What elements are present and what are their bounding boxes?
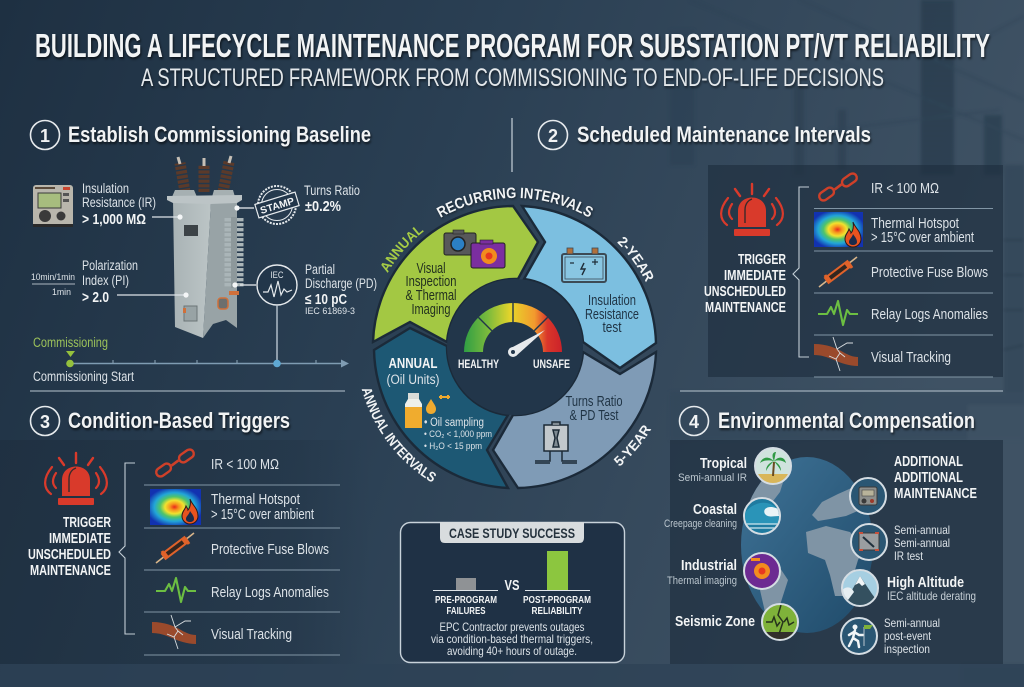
- text: tropical: Tropical: [700, 456, 747, 472]
- text: case study description: EPC Contractor prevents outages: [440, 620, 584, 634]
- heading: section 4: [680, 406, 975, 436]
- text: insulation resistance test: Insulation: [588, 292, 636, 309]
- text: visual inspection: Visual: [416, 260, 446, 277]
- icon: red siren: [45, 453, 107, 505]
- icon: protective fuse: [819, 257, 857, 287]
- text: trigger immediate unscheduled maintenance: UNSCHEDULED: [28, 547, 111, 563]
- text: trigger immediate unscheduled maintenance: MAINTENANCE: [30, 563, 111, 579]
- segment: 2-year insulation resistance: [522, 206, 656, 368]
- heading: section 4: Environmental Compensation: [718, 408, 975, 433]
- text: trigger immediate unscheduled maintenance: IMMEDIATE: [49, 531, 111, 547]
- panel: 3 condition-based triggers: Visual Tracking: [211, 627, 292, 643]
- heading: section 4: 4: [689, 412, 699, 432]
- tab: case study heading: [440, 522, 584, 543]
- callout: turns ratio: [304, 183, 360, 215]
- callout: partial discharge: ≤ 10 pC: [305, 292, 347, 308]
- icon: stamp test: [851, 524, 887, 560]
- callout: partial discharge: IEC 61869-3: [305, 306, 355, 317]
- heading: section 1: [30, 120, 371, 150]
- text: semi-annual IR test: Semi-annual: [894, 523, 950, 537]
- text: thermal hotspot: [211, 492, 314, 523]
- icon: broken chain: [818, 172, 858, 202]
- heading: section 3: [30, 406, 290, 436]
- icon: post-event hiker: [841, 618, 877, 654]
- callout: polarization index: Polarization: [82, 258, 138, 273]
- text: trigger immediate unscheduled maintenance: [704, 252, 786, 316]
- text: tropical: Semi-annual IR: [678, 472, 747, 484]
- text: industrial: Industrial: [681, 558, 737, 574]
- callout: polarization index: Index (PI): [82, 273, 129, 288]
- text: insulation resistance test: test: [602, 319, 622, 336]
- icon: insulation tracking crack: [814, 337, 858, 371]
- text: high altitude: IEC altitude derating: [887, 589, 976, 603]
- text: thermal hotspot: Thermal Hotspot: [211, 492, 300, 508]
- text: thermal hotspot: > 15°C over ambient: [871, 230, 974, 246]
- icon: protective fuse: [156, 533, 194, 563]
- panel: 4 environmental compensation: [664, 406, 1003, 664]
- icon: insulation resistance meter: [33, 185, 73, 227]
- bar chart: pre vs post program: FAILURES: [446, 606, 486, 617]
- text: case study description: avoiding 40+ hours of outage.: [447, 644, 577, 658]
- text: thermal hotspot: [871, 216, 974, 246]
- text: turns ratio and PD test: & PD Test: [570, 407, 619, 424]
- icon: high altitude: [842, 570, 878, 606]
- icon: industrial: [744, 553, 780, 589]
- text: insulation resistance test: [585, 292, 639, 336]
- tab: case study heading: CASE STUDY SUCCESS: [449, 525, 575, 541]
- text: trigger immediate unscheduled maintenance: TRIGGER: [738, 252, 786, 268]
- text: seismic zone: Seismic Zone: [675, 614, 755, 630]
- gauge: healthy to unsafe: [458, 303, 570, 371]
- segment: 5-year turns ratio: [493, 352, 656, 488]
- callout: polarization index: > 2.0: [82, 290, 109, 306]
- callout: turns ratio: ±0.2%: [305, 199, 341, 215]
- callout: insulation resistance: Insulation: [82, 181, 129, 196]
- panel: 2 scheduled maintenance intervals: Protective Fuse Blows: [871, 265, 988, 281]
- text: oil sampling limits: • Oil sampling: [424, 417, 484, 429]
- icon: stamp: STAMP: [259, 196, 296, 217]
- text: additional maintenance: MAINTENANCE: [894, 486, 977, 502]
- heading: section 3: Condition-Based Triggers: [68, 408, 290, 433]
- callout: partial discharge: Discharge (PD): [305, 276, 377, 291]
- chart: recurring intervals wheel: [362, 188, 658, 490]
- heading: section 2: Scheduled Maintenance Intervals: [577, 122, 871, 147]
- text: trigger immediate unscheduled maintenance: MAINTENANCE: [705, 300, 786, 316]
- text: annual oil units: [386, 355, 440, 387]
- panel: 2 scheduled maintenance intervals: Relay Logs Anomalies: [871, 307, 988, 323]
- bar chart: pre vs post program: POST-PROGRAM: [523, 595, 591, 606]
- icon: IEC partial discharge gauge: IEC: [270, 270, 284, 281]
- icon: broken chain: [155, 448, 195, 478]
- curved label: annual intervals: ANNUAL INTERVALS: [362, 389, 436, 482]
- curved label: 2-year: 2-YEAR: [617, 237, 654, 282]
- text: insulation resistance test: Resistance: [585, 306, 639, 323]
- icon: cameras: [444, 230, 505, 268]
- segment: annual oil units: [374, 328, 508, 488]
- text: coastal: [664, 502, 737, 530]
- icon: insulation tracking crack: [152, 615, 196, 649]
- text: trigger immediate unscheduled maintenance: TRIGGER: [63, 515, 111, 531]
- text: thermal hotspot: Thermal Hotspot: [871, 216, 959, 232]
- text: thermal hotspot: > 15°C over ambient: [211, 507, 314, 523]
- gauge: healthy to unsafe: UNSAFE: [533, 357, 570, 371]
- icon: relay waveform: [818, 301, 858, 325]
- icon: IEC partial discharge gauge: [232, 265, 297, 361]
- text: oil sampling limits: [424, 417, 492, 451]
- text: case study description: [431, 620, 593, 658]
- callout: polarization index: [31, 258, 189, 306]
- panel: case study success: [400, 522, 624, 662]
- icon: meter: [850, 478, 886, 514]
- text: tropical: [678, 456, 747, 484]
- text: high altitude: High Altitude: [887, 575, 964, 591]
- globe: [741, 457, 873, 633]
- panel: 2 scheduled maintenance intervals: [538, 120, 1003, 377]
- icon: test bushing: [535, 422, 577, 463]
- text: coastal: Coastal: [693, 502, 737, 518]
- text: visual inspection: Imaging: [412, 301, 450, 318]
- curved label: annual: ANNUAL: [381, 227, 424, 273]
- callout: turns ratio: Turns Ratio: [304, 183, 360, 198]
- icon: seismic zone: [762, 604, 798, 641]
- center disc: [447, 279, 583, 415]
- callout: polarization index: 1min: [52, 287, 71, 297]
- text: oil sampling limits: • H₂O < 15 ppm: [424, 441, 482, 451]
- text: turns ratio and PD test: [566, 393, 622, 424]
- text: industrial: Thermal imaging: [667, 575, 737, 587]
- text: post-event inspection: inspection: [884, 642, 930, 656]
- icon: thermal hotspot: [150, 489, 201, 525]
- text: visual inspection: & Thermal: [406, 287, 456, 304]
- text: high altitude: [887, 575, 976, 603]
- text: industrial: [667, 558, 737, 587]
- gauge: healthy to unsafe: HEALTHY: [458, 357, 499, 371]
- curved label: recurring intervals: RECURRING INTERVALS: [436, 188, 594, 219]
- segment: annual inspection: [373, 206, 538, 342]
- text: case study description: via condition-based thermal triggers,: [431, 632, 593, 646]
- icon: red siren: [721, 184, 783, 236]
- bar chart: pre vs post program: RELIABILITY: [532, 606, 583, 617]
- text: additional maintenance: [894, 454, 977, 502]
- text: visual inspection: Inspection: [406, 273, 456, 290]
- callout: polarization index: 10min/1min: [31, 272, 75, 282]
- callout: partial discharge: Partial: [305, 262, 335, 277]
- bar chart: pre vs post program: VS: [504, 577, 520, 594]
- heading: section 3: 3: [40, 412, 50, 432]
- timeline: commissioning: Commissioning: [33, 335, 108, 350]
- heading: section 2: [538, 120, 871, 150]
- panel: 3 condition-based triggers: IR < 100 MΩ: [211, 457, 279, 473]
- text: coastal: Creepage cleaning: [664, 518, 737, 530]
- callout: insulation resistance: [82, 181, 183, 228]
- panel: 3 condition-based triggers: Protective Fuse Blows: [211, 542, 329, 558]
- text: annual oil units: (Oil Units): [386, 372, 440, 387]
- heading: section 1: Establish Commissioning Baseline: [68, 122, 371, 147]
- icon: oil sample bottle: [405, 393, 450, 428]
- text: additional maintenance: ADDITIONAL: [894, 454, 963, 470]
- text: trigger immediate unscheduled maintenance: [28, 515, 111, 579]
- callout: insulation resistance: > 1,000 MΩ: [82, 212, 146, 228]
- icon: battery: [562, 248, 606, 282]
- text: post-event inspection: [884, 616, 940, 656]
- bar chart: pre vs post program: PRE-PROGRAM: [435, 595, 497, 606]
- text: visual inspection: [406, 260, 456, 318]
- icon: PT/VT transformer: [167, 156, 242, 338]
- callout: insulation resistance: Resistance (IR): [82, 195, 156, 210]
- timeline: commissioning: Commissioning Start: [33, 369, 134, 384]
- heading: section 2: 2: [548, 126, 558, 146]
- text: turns ratio and PD test: Turns Ratio: [566, 393, 622, 410]
- text: trigger immediate unscheduled maintenance: IMMEDIATE: [724, 268, 786, 284]
- icon: relay waveform: [156, 578, 196, 602]
- text: semi-annual IR test: IR test: [894, 549, 924, 563]
- panel: 3 condition-based triggers: [0, 406, 370, 664]
- icon: coastal: [744, 498, 780, 534]
- bar chart: pre vs post program: [433, 551, 591, 617]
- panel: 1 establish commissioning baseline: [30, 120, 377, 384]
- panel: 3 condition-based triggers: Relay Logs Anomalies: [211, 585, 329, 601]
- callout: partial discharge: [305, 262, 377, 317]
- text: annual oil units: ANNUAL: [388, 355, 438, 372]
- timeline: commissioning: [33, 335, 349, 384]
- text: oil sampling limits: • CO₂ < 1,000 ppm: [424, 429, 492, 439]
- icon: thermal hotspot: [814, 212, 863, 247]
- panel: 2 scheduled maintenance intervals: IR < 100 MΩ: [871, 181, 939, 197]
- icon: tropical: [755, 448, 791, 486]
- heading: section 1: 1: [40, 126, 50, 146]
- curved label: 5-year: 5-YEAR: [614, 425, 652, 466]
- panel: 2 scheduled maintenance intervals: Visual Tracking: [871, 350, 951, 366]
- text: trigger immediate unscheduled maintenance: UNSCHEDULED: [704, 284, 786, 300]
- text: semi-annual IR test: Semi-annual: [894, 536, 950, 550]
- text: additional maintenance: ADDITIONAL: [894, 470, 963, 486]
- text: semi-annual IR test: [894, 523, 950, 563]
- icon: stamp: [234, 186, 299, 224]
- text: post-event inspection: post-event: [884, 629, 932, 643]
- text: post-event inspection: Semi-annual: [884, 616, 940, 630]
